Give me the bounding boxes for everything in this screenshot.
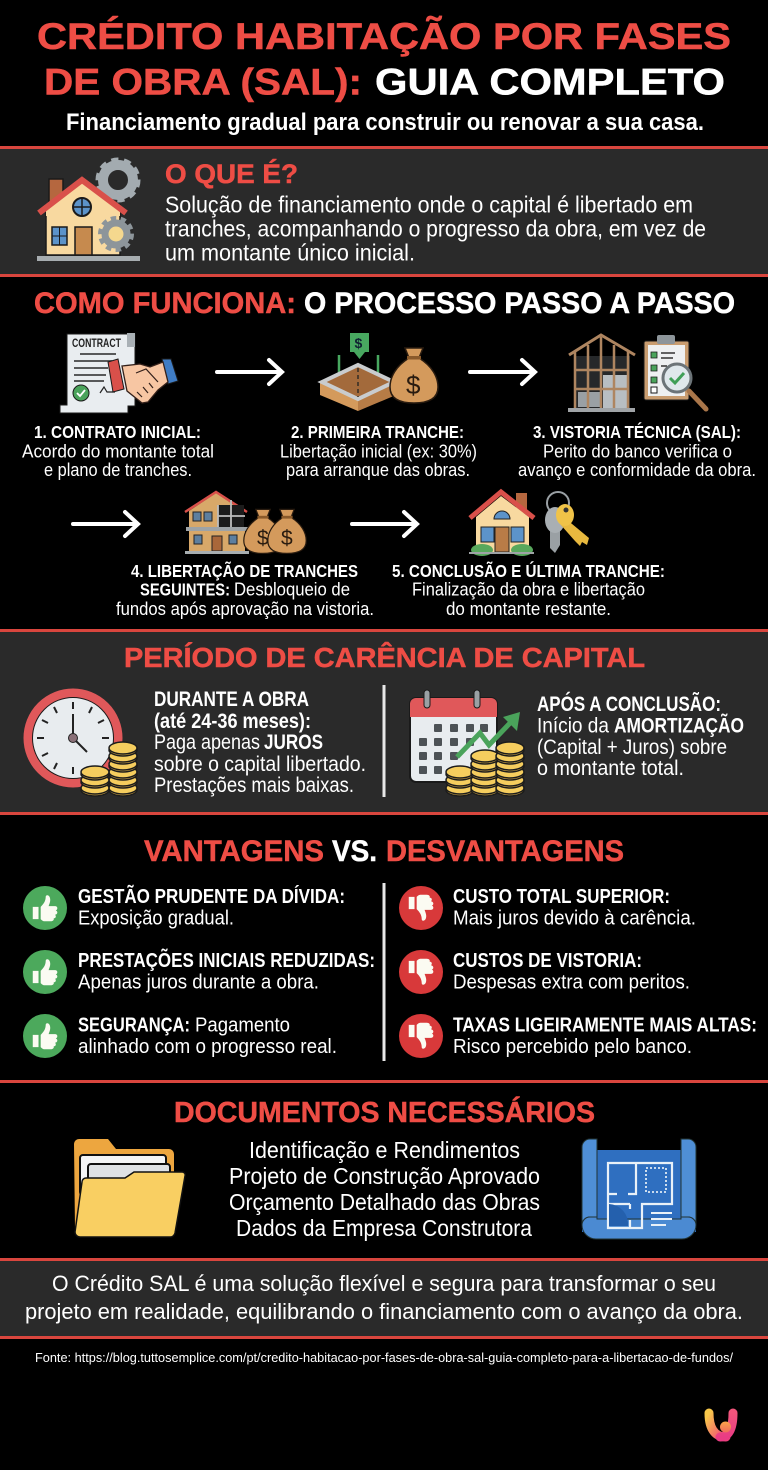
step 1 text (22, 422, 214, 480)
heading: como funciona (34, 287, 735, 320)
icon: finished house and keys (469, 492, 589, 556)
document list: Projeto de Construção Aprovado (229, 1163, 540, 1189)
heading: como funciona: COMO FUNCIONA: (34, 287, 296, 320)
arrow 1 (217, 360, 282, 384)
heading: como funciona: O PROCESSO PASSO A PASSO (304, 287, 735, 320)
step 3 text: Perito do banco verifica o (543, 442, 732, 462)
title line 2: GUIA COMPLETO (375, 62, 725, 102)
description: um montante único inicial. (165, 240, 415, 266)
icon: folder (74, 1139, 185, 1237)
step 5 text: Finalização da obra e libertação (412, 580, 645, 600)
step 2 text: para arranque das obras. (286, 460, 470, 480)
icon: foundation and money bag: $ (354, 335, 362, 351)
step 1 text: 1. CONTRATO INICIAL: (34, 422, 201, 442)
disadvantage 3 (399, 1014, 757, 1058)
heading: vantagens vs desvantagens: DESVANTAGENS (386, 835, 624, 868)
icon: foundation and money bag: $ (406, 370, 421, 400)
panel: conclusion (0, 1258, 768, 1339)
step 2 text (280, 422, 477, 480)
step 4 text: 4. LIBERTAÇÃO DE TRANCHES (131, 560, 358, 581)
advantage 3: Pagamento (195, 1014, 290, 1036)
icon: building and money bags (185, 492, 306, 554)
during construction text: (até 24-36 meses): (154, 710, 311, 733)
step 4 text: SEGUINTES: (140, 580, 230, 600)
heading: o que é: O QUE É? (165, 158, 298, 189)
during construction text: JUROS (264, 731, 323, 754)
subtitle: Financiamento gradual para construir ou renovar a sua casa. (66, 109, 704, 136)
disadvantage 1: Mais juros devido à carência. (453, 908, 696, 930)
panel: período de carência (0, 629, 768, 815)
arrow 2 (470, 360, 535, 384)
section: documentos necessários (0, 1080, 768, 1241)
after completion text: Início da (537, 714, 609, 738)
disadvantage 2: CUSTOS DE VISTORIA: (453, 950, 642, 972)
step 5 text (392, 560, 665, 619)
arrow 3 (73, 512, 138, 536)
description: tranches, acompanhando o progresso da obra, em vez de (165, 216, 706, 242)
icon: building and money bags: $ (281, 527, 293, 550)
section: vantagens vs desvantagens (23, 835, 757, 1061)
step 3 text: 3. VISTORIA TÉCNICA (SAL): (533, 421, 741, 442)
document list: Identificação e Rendimentos (249, 1137, 520, 1163)
section: como funciona (22, 287, 756, 619)
advantage 3: alinhado com o progresso real. (78, 1036, 337, 1058)
after completion text: APÓS A CONCLUSÃO: (537, 692, 721, 716)
step 5 text: 5. CONCLUSÃO E ÚLTIMA TRANCHE: (392, 560, 665, 581)
step 1 text: Acordo do montante total (22, 442, 214, 462)
icon: house with gears (37, 160, 140, 261)
after completion text: (Capital + Juros) sobre (537, 736, 727, 759)
source: Fonte: https://blog.tuttosemplice.com/pt/credito-habitacao-por-fases-de-obra-sal-guia-completo-para-a-libertacao-de-fundos/ (35, 1351, 734, 1365)
icon: contract and handshake (60, 333, 178, 413)
advantage 1: Exposição gradual. (78, 908, 234, 930)
advantage 2: PRESTAÇÕES INICIAIS REDUZIDAS: (78, 948, 375, 972)
disadvantage 3: Risco percebido pelo banco. (453, 1036, 692, 1058)
icon: calendar and coins (410, 690, 524, 796)
icon: building and money bags: $ (257, 527, 269, 550)
title line 2 (44, 62, 725, 102)
step 4 text: Desbloqueio de (234, 580, 350, 600)
document list: Dados da Empresa Construtora (236, 1215, 532, 1241)
heading: vantagens vs desvantagens: VS. (332, 835, 377, 868)
after completion text: AMORTIZAÇÃO (614, 714, 744, 738)
after completion text (537, 692, 744, 780)
conclusion text (25, 1271, 743, 1324)
heading: vantagens vs desvantagens: VANTAGENS (144, 835, 324, 868)
during construction text: Paga apenas (154, 731, 260, 754)
disadvantage 2: Despesas extra com peritos. (453, 972, 690, 994)
heading: vantagens vs desvantagens (144, 835, 624, 868)
disadvantage 2 (399, 950, 690, 994)
step 1 text: e plano de tranches. (44, 460, 192, 480)
title line 2: DE OBRA (SAL): (44, 62, 362, 102)
advantage 3 (23, 1014, 337, 1058)
step 3 text (518, 421, 756, 480)
description (165, 192, 706, 266)
during construction text (154, 688, 366, 797)
advantage 3: SEGURANÇA: (78, 1014, 190, 1036)
during construction text: sobre o capital libertado. (154, 753, 366, 776)
during construction text: DURANTE A OBRA (154, 688, 309, 711)
icon: blueprint (582, 1139, 696, 1239)
disadvantage 1: CUSTO TOTAL SUPERIOR: (453, 886, 670, 908)
step 4 text (116, 560, 374, 619)
step 2 text: Libertação inicial (ex: 30%) (280, 442, 477, 462)
icon: foundation and money bag (320, 333, 438, 411)
step 2 text: 2. PRIMEIRA TRANCHE: (291, 422, 464, 442)
heading: documentos: DOCUMENTOS NECESSÁRIOS (174, 1095, 595, 1129)
advantage 2: Apenas juros durante a obra. (78, 972, 319, 994)
after completion text: o montante total. (537, 757, 684, 780)
advantage 1 (23, 885, 345, 930)
description: Solução de financiamento onde o capital é libertado em (165, 192, 693, 218)
title line 1: CRÉDITO HABITAÇÃO POR FASES (37, 15, 731, 57)
icon: clock and coins (28, 693, 137, 796)
advantage 1: GESTÃO PRUDENTE DA DÍVIDA: (78, 885, 345, 908)
document list (229, 1137, 540, 1241)
step 5 text: do montante restante. (446, 599, 611, 619)
during construction text: Prestações mais baixas. (154, 774, 354, 797)
icon: house frame and checklist (568, 335, 706, 412)
header (37, 15, 731, 136)
arrow 4 (352, 512, 417, 536)
logo (709, 1413, 733, 1437)
step 4 text: fundos após aprovação na vistoria. (116, 599, 374, 619)
conclusion text: projeto em realidade, equilibrando o financiamento com o avanço da obra. (25, 1299, 743, 1324)
disadvantage 1 (399, 886, 696, 930)
conclusion text: O Crédito SAL é uma solução flexível e segura para transformar o seu (52, 1271, 716, 1296)
panel: o que é (0, 146, 768, 277)
heading: período de carência: PERÍODO DE CARÊNCIA DE CAPITAL (124, 642, 645, 673)
advantage 2 (23, 948, 375, 994)
icon: contract and handshake: CONTRACT (72, 338, 121, 350)
document list: Orçamento Detalhado das Obras (229, 1189, 540, 1215)
